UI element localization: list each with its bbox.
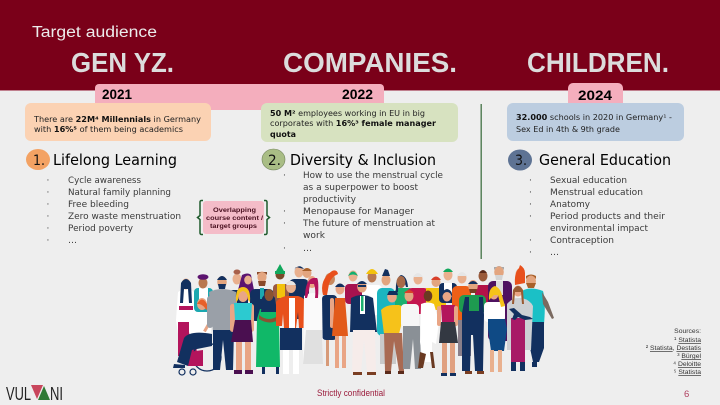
list: lifelong learning: Natural family planning bbox=[68, 188, 171, 198]
back row figures bbox=[176, 264, 554, 367]
section heading: diversity and inclusion: Diversity & Inclusion bbox=[290, 151, 436, 169]
list: general education: Contraception bbox=[550, 236, 614, 246]
list: diversity and inclusion: · bbox=[283, 207, 286, 217]
list: general education: Menstrual education bbox=[550, 188, 643, 198]
logo: vulvani: VUL bbox=[6, 384, 31, 404]
info box: gen yz: There are 22M⁴ Millennials in Germany bbox=[33, 115, 201, 124]
sources list: ¹ Statista bbox=[674, 337, 701, 344]
info box: companies: quota bbox=[270, 130, 296, 139]
section heading: diversity and inclusion: 2. bbox=[268, 153, 281, 169]
timeline tab 2024 bbox=[568, 83, 623, 106]
list: lifelong learning bbox=[46, 176, 181, 246]
list: general education: environmental impact bbox=[550, 224, 648, 234]
list: diversity and inclusion: The future of menstruation at bbox=[302, 219, 435, 229]
list: diversity and inclusion: · bbox=[283, 219, 286, 229]
logo: vulvani: NI bbox=[50, 384, 63, 404]
heading: companies: COMPANIES. bbox=[283, 47, 457, 78]
list: lifelong learning: Period poverty bbox=[68, 224, 134, 234]
list: diversity and inclusion bbox=[283, 171, 443, 254]
divider line bbox=[480, 104, 482, 259]
list: diversity and inclusion: · bbox=[283, 171, 286, 181]
section heading: lifelong learning: Lifelong Learning bbox=[53, 151, 177, 169]
list: general education bbox=[529, 176, 665, 258]
list: lifelong learning: … bbox=[68, 236, 77, 246]
sources list: ² Statista, Destatis bbox=[646, 345, 702, 352]
list: general education: · bbox=[529, 176, 532, 186]
header band bbox=[0, 0, 720, 91]
list: lifelong learning: Cycle awareness bbox=[68, 176, 141, 186]
list: lifelong learning: · bbox=[46, 200, 49, 210]
callout: overlapping course content: target groups bbox=[210, 223, 257, 230]
list: lifelong learning: · bbox=[46, 236, 49, 246]
logo: vulvani bbox=[6, 384, 63, 404]
list: lifelong learning: · bbox=[46, 212, 49, 222]
info box: children bbox=[507, 103, 684, 141]
list: general education: · bbox=[529, 248, 532, 258]
list: diversity and inclusion: work bbox=[303, 231, 326, 241]
callout: overlapping course content: course content / bbox=[206, 215, 263, 222]
sources list: ⁴ Deloitte bbox=[673, 361, 701, 368]
section heading: general education: General Education bbox=[539, 151, 671, 169]
list: general education: Sexual education bbox=[550, 176, 627, 186]
footer: strictly confidential: Strictly confidential bbox=[317, 388, 385, 398]
page number: 6 bbox=[684, 389, 689, 400]
list: lifelong learning: Zero waste menstruation bbox=[68, 212, 181, 222]
info box: companies: 50 M² employees working in EU in big bbox=[270, 109, 425, 118]
section heading: general education: 3. bbox=[515, 153, 527, 169]
illustration: diverse group of people bbox=[173, 264, 554, 376]
sources list: Sources: bbox=[674, 328, 701, 335]
list: diversity and inclusion: How to use the menstrual cycle bbox=[303, 171, 443, 181]
callout: overlapping course content: Overlapping bbox=[213, 207, 256, 214]
list: general education: · bbox=[529, 212, 532, 222]
section heading: diversity and inclusion bbox=[262, 149, 436, 170]
info box: companies: corporates with 16%³ female manager bbox=[270, 119, 436, 128]
sources list: ⁵ Statista bbox=[674, 369, 701, 376]
list: lifelong learning: Free bleeding bbox=[68, 200, 129, 210]
timeline tab 2024: 2024 bbox=[578, 87, 612, 103]
info box: gen yz: with 16%⁵ of them being academics bbox=[34, 125, 183, 134]
section heading: lifelong learning: 1. bbox=[33, 153, 45, 169]
title: target audience: Target audience bbox=[32, 24, 157, 41]
callout: overlapping course content bbox=[198, 200, 270, 234]
sources list: ³ Bürgel bbox=[677, 353, 701, 360]
section heading: lifelong learning bbox=[26, 149, 177, 170]
list: general education: · bbox=[529, 236, 532, 246]
section heading: general education bbox=[508, 150, 671, 170]
sources list bbox=[646, 328, 702, 376]
info box: children: 32.000 schools in 2020 in Germany¹ - bbox=[516, 113, 672, 122]
heading: gen yz: GEN YZ. bbox=[71, 47, 174, 78]
list: general education: Anatomy bbox=[550, 200, 591, 210]
list: diversity and inclusion: productivity bbox=[303, 195, 357, 205]
timeline bar 2021 to 2022: 2022 bbox=[342, 86, 373, 102]
info box: companies bbox=[261, 103, 458, 142]
list: lifelong learning: · bbox=[46, 188, 49, 198]
list: lifelong learning: · bbox=[46, 224, 49, 234]
info box: children: Sex Ed in 4th & 9th grade bbox=[516, 125, 620, 134]
list: diversity and inclusion: … bbox=[303, 244, 312, 254]
list: diversity and inclusion: · bbox=[283, 244, 286, 254]
list: diversity and inclusion: Menopause for Manager bbox=[303, 207, 414, 217]
heading: children: CHILDREN. bbox=[527, 47, 669, 78]
timeline bar 2021 to 2022: 2021 bbox=[102, 86, 132, 102]
list: general education: … bbox=[550, 248, 559, 258]
list: general education: · bbox=[529, 200, 532, 210]
info box: gen yz bbox=[25, 103, 211, 141]
timeline bar 2021 to 2022 bbox=[95, 84, 384, 110]
list: diversity and inclusion: as a superpower to boost bbox=[303, 183, 418, 193]
list: general education: · bbox=[529, 188, 532, 198]
front row figures bbox=[173, 276, 533, 376]
list: general education: Period products and their bbox=[550, 212, 665, 222]
list: lifelong learning: · bbox=[46, 176, 49, 186]
